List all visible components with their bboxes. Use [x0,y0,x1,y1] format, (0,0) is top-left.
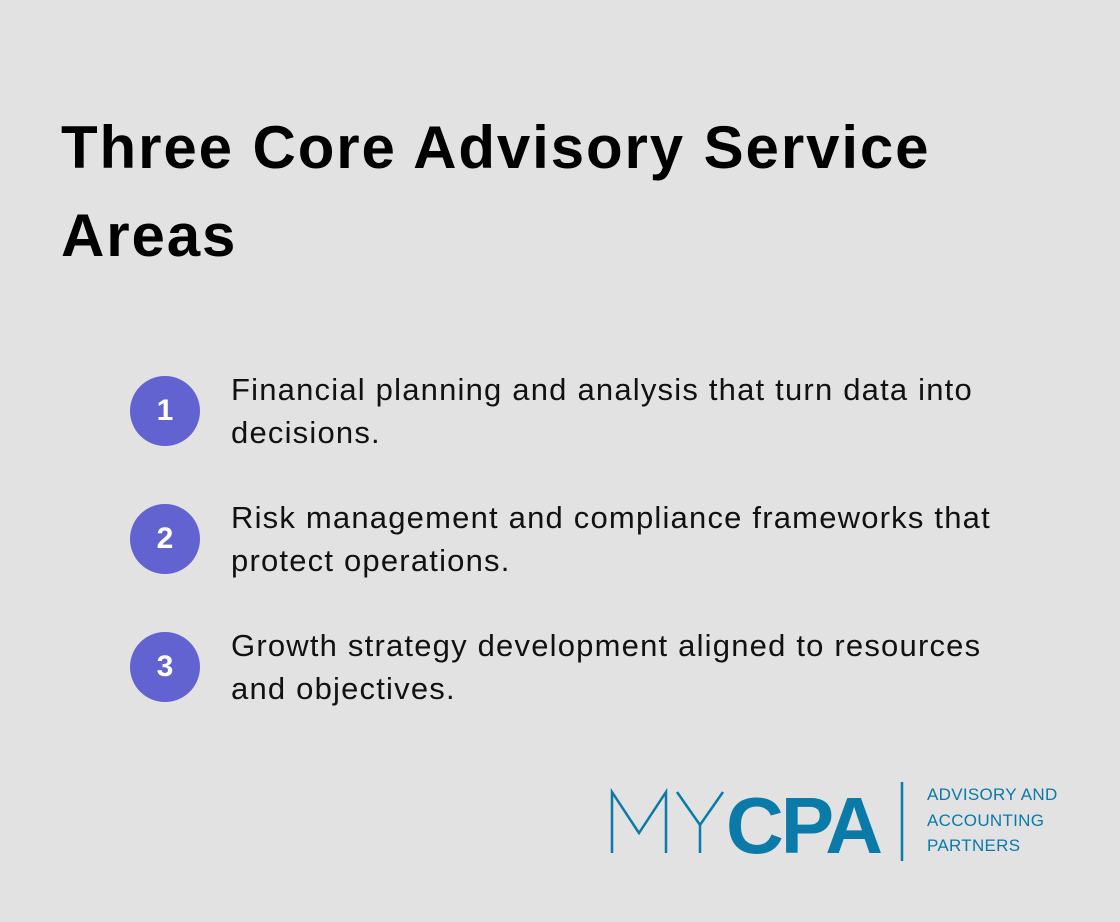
text 1 [231,372,973,450]
text 2: Risk management and compliance frameworks that [231,500,991,535]
text 3: Growth strategy development aligned to resources [231,628,981,663]
badge 1 [130,376,200,446]
item 3 [130,628,981,706]
logo: ACCOUNTING [927,811,1044,830]
badge 3 [130,632,200,702]
badge 1: 1 [157,394,173,427]
text 2: protect operations. [231,543,511,578]
text 1: decisions. [231,415,381,450]
logo: ADVISORY AND [927,785,1058,804]
text 1: Financial planning and analysis that turn data into [231,372,973,407]
badge 3: 3 [157,650,173,683]
logo [610,781,1058,870]
item 2 [130,500,991,578]
text 2 [231,500,991,578]
badge 2 [130,504,200,574]
title: Areas [61,202,237,269]
text 3 [231,628,981,706]
item 1 [130,372,973,450]
badge 2: 2 [157,522,173,555]
text 3: and objectives. [231,671,456,706]
title: Three Core Advisory Service [61,114,930,181]
title [61,114,930,269]
logo: CPA [726,781,881,870]
logo: PARTNERS [927,836,1020,855]
